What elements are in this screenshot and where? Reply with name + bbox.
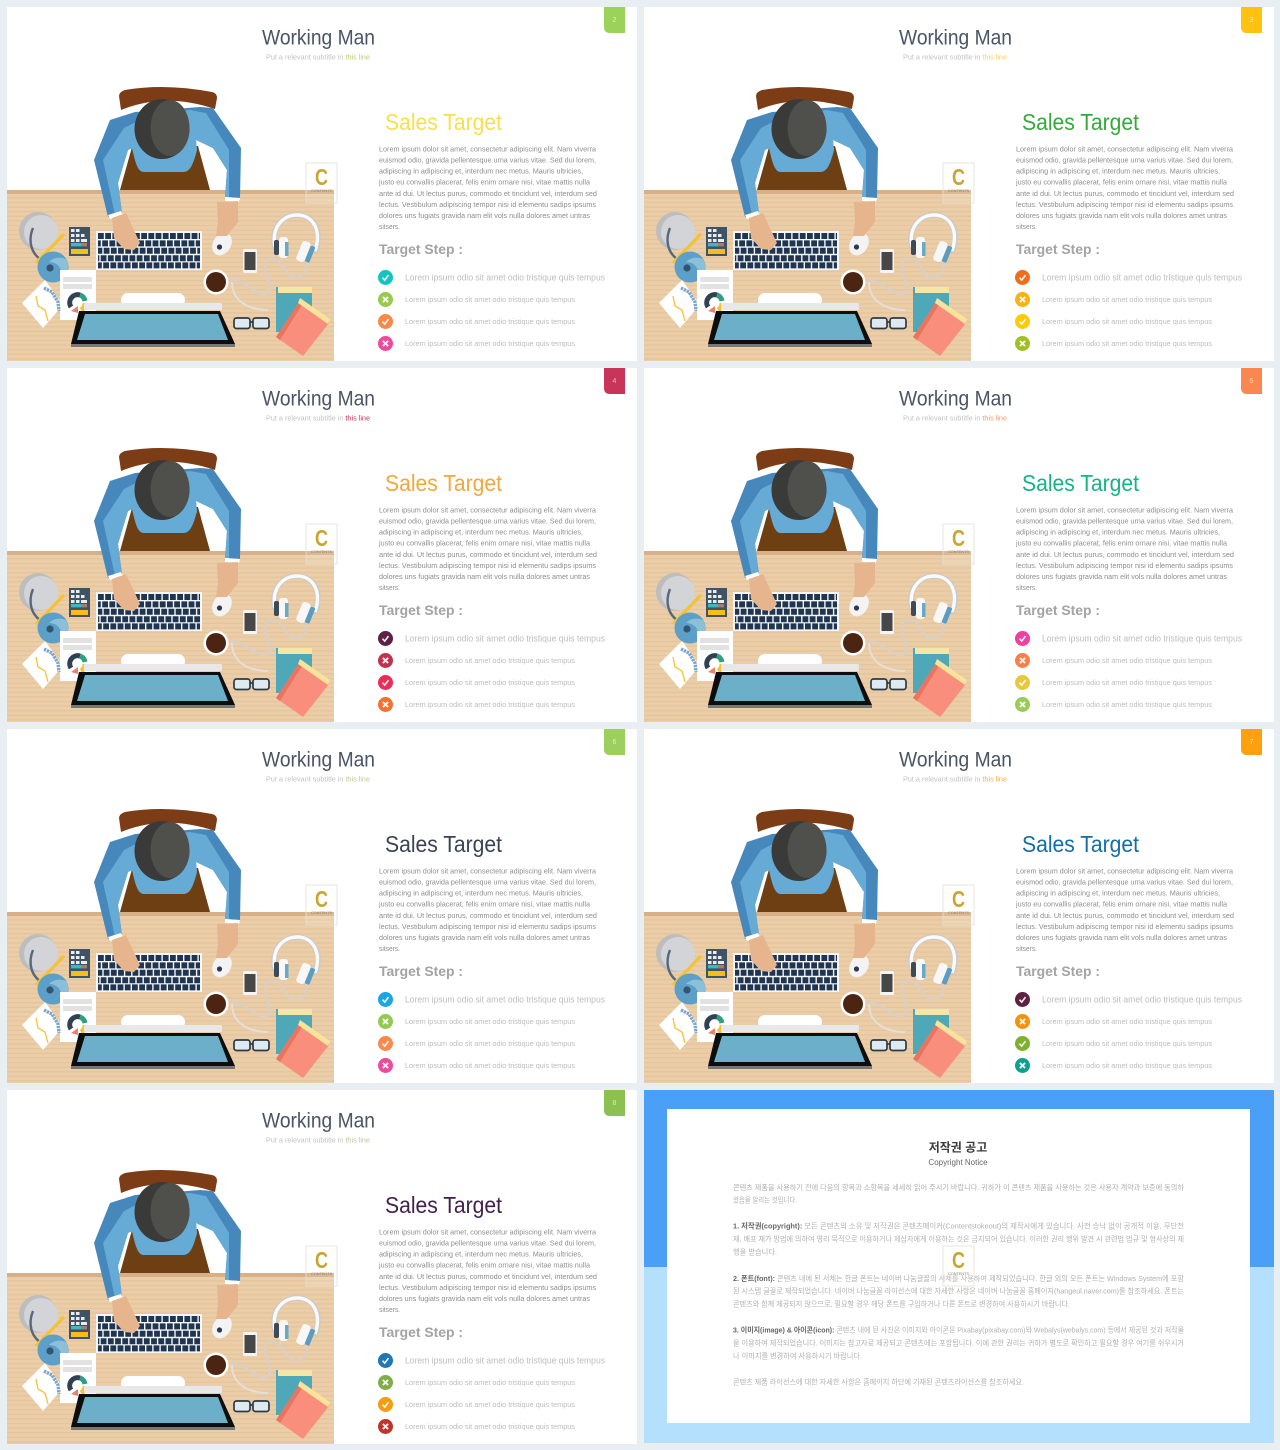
watermark: CONTENTS	[311, 1272, 333, 1276]
heading: Sales Target	[385, 831, 503, 857]
step item 2	[1015, 1014, 1212, 1029]
intro paragraph: 셨음을 알리는 것입니다.	[733, 1196, 797, 1204]
heading: Sales Target	[385, 109, 503, 135]
body text: adipiscing in adipiscing et, interdum nec metus. Mauris ultricies,	[379, 1250, 583, 1258]
body text: sitsers.	[379, 583, 400, 592]
subtitle: Put a relevant subtitle in this line	[266, 416, 370, 422]
body text: euismod odio, gravida pellentesque urna varius vitae. Sed dui lorem,	[379, 156, 596, 164]
body text: adipiscing in adipiscing et, interdum nec metus. Mauris ultricies,	[1016, 528, 1220, 536]
step item 4	[1015, 336, 1212, 351]
body text: lectus. Vestibulum adipiscing tempor nisi id elementu sadips ipsums	[1016, 922, 1233, 931]
step item 3	[378, 675, 575, 690]
step item 4: Lorem ipsum odio sit amet odio tristique quis tempus	[405, 700, 575, 709]
title: Working Man	[899, 748, 1012, 772]
body text: adipiscing in adipiscing et, interdum nec metus. Mauris ultricies,	[1016, 888, 1220, 898]
body text: justo eu convallis placerat, felis enim ornare nisi, vitae mattis nulla	[1015, 538, 1228, 548]
subtitle: Put a relevant subtitle in this line	[266, 54, 370, 62]
watermark	[306, 524, 337, 564]
step item 3: Lorem ipsum odio sit amet odio tristique quis tempus	[1042, 678, 1212, 687]
step list	[378, 631, 605, 712]
watermark: CONTENTS	[311, 189, 333, 193]
body text	[378, 866, 597, 953]
body text: lectus. Vestibulum adipiscing tempor nisi id elementu sadips ipsums	[1016, 561, 1233, 570]
body text: euismod odio, gravida pellentesque urna varius vitae. Sed dui lorem,	[1016, 156, 1233, 164]
step list	[378, 992, 605, 1073]
panel: slide 4	[7, 368, 637, 722]
step item 3: Lorem ipsum odio sit amet odio tristique quis tempus	[405, 1400, 575, 1409]
panel: slide 6	[7, 729, 637, 1083]
subtitle: Put a relevant subtitle in this line	[266, 1138, 370, 1144]
copyright title: 저작권 공고	[929, 1140, 987, 1154]
step item 1	[378, 631, 605, 646]
watermark	[943, 1246, 974, 1286]
body text: justo eu convallis placerat, felis enim ornare nisi, vitae mattis nulla	[378, 178, 591, 186]
body text: dolores uns fugiats gravida nam elit vols nulla dolores amet untras	[1016, 572, 1227, 581]
step item 2	[378, 1375, 575, 1390]
page number tab	[604, 7, 625, 33]
step item 4	[378, 697, 575, 712]
section 3: image and icon: 나 이미지를 변경하여 사용하시기 바랍니다.	[733, 1352, 862, 1360]
step item 3: Lorem ipsum odio sit amet odio tristique quis tempus	[1042, 317, 1212, 326]
heading: Sales Target	[1022, 109, 1140, 135]
watermark: C	[952, 525, 965, 551]
page number tab: 6	[613, 739, 617, 746]
body text: justo eu convallis placerat, felis enim ornare nisi, vitae mattis nulla	[378, 1260, 591, 1270]
body text: sitsers.	[1016, 944, 1037, 953]
subtitle: Put a relevant subtitle in this line	[903, 416, 1007, 422]
body text: sitsers.	[1016, 583, 1037, 592]
title: Working Man	[899, 388, 1012, 410]
copyright subtitle: Copyright Notice	[928, 1158, 988, 1167]
section 1: copyright	[733, 1222, 1184, 1256]
body text: euismod odio, gravida pellentesque urna varius vitae. Sed dui lorem,	[1016, 516, 1233, 526]
heading: Sales Target	[385, 470, 503, 496]
target step heading: Target Step :	[1016, 963, 1100, 979]
step item 1	[378, 1353, 605, 1368]
panel: slide 3	[644, 7, 1274, 361]
body text: justo eu convallis placerat, felis enim ornare nisi, vitae mattis nulla	[378, 900, 591, 908]
body text: dolores uns fugiats gravida nam elit vols nulla dolores amet untras	[379, 933, 590, 942]
step item 4	[1015, 1058, 1212, 1073]
title: Working Man	[899, 26, 1012, 50]
step item 4	[378, 336, 575, 351]
step item 4	[1015, 697, 1212, 712]
watermark: C	[952, 886, 965, 912]
body text: justo eu convallis placerat, felis enim ornare nisi, vitae mattis nulla	[1015, 178, 1228, 186]
body text: Lorem ipsum dolor sit amet, consectetur adipiscing elit. Nam viverra	[379, 506, 597, 514]
body text: ante id dui. Ut lectus purus, commodo et tincidunt vel, interdum sed	[1016, 550, 1234, 559]
watermark: CONTENTS	[948, 550, 970, 554]
section 1: copyright: 1. 저작권(copyright): 모든 콘텐츠의 소유 및 저작권은 콘텐츠메이커(Contentstokeout)의 제작사에게 있습니다. 사전 승낙 없이 공개적 이용, 무단전	[733, 1222, 1184, 1230]
body text: Lorem ipsum dolor sit amet, consectetur adipiscing elit. Nam viverra	[379, 144, 597, 154]
watermark: CONTENTS	[948, 1272, 970, 1276]
page number tab: 4	[613, 378, 617, 385]
step item 3	[1015, 314, 1212, 329]
step item 2	[378, 1014, 575, 1029]
target step heading: Target Step :	[379, 1324, 463, 1340]
body text: justo eu convallis placerat, felis enim ornare nisi, vitae mattis nulla	[1015, 900, 1228, 908]
body text: sitsers.	[1016, 222, 1037, 231]
body text: lectus. Vestibulum adipiscing tempor nisi id elementu sadips ipsums	[379, 922, 596, 931]
body text: lectus. Vestibulum adipiscing tempor nisi id elementu sadips ipsums	[379, 200, 596, 209]
body text: lectus. Vestibulum adipiscing tempor nisi id elementu sadips ipsums	[1016, 200, 1233, 209]
panel: slide 8	[7, 1090, 637, 1444]
body text: sitsers.	[379, 1305, 400, 1314]
body text	[1015, 144, 1234, 231]
target step heading: Target Step :	[379, 602, 463, 618]
target step heading: Target Step :	[1016, 602, 1100, 618]
step list	[378, 270, 605, 351]
body text	[1015, 506, 1234, 592]
step item 2: Lorem ipsum odio sit amet odio tristique quis tempus	[405, 656, 575, 665]
intro paragraph: 콘텐츠 제품을 사용하기 전에 다음의 항목과 소항목을 세세히 읽어 주시기 바랍니다. 귀하가 이 콘텐츠 제품을 사용하는 것은 사용자 계약과 보증에 동의하	[733, 1183, 1184, 1192]
step item 3	[1015, 1036, 1212, 1051]
body text: lectus. Vestibulum adipiscing tempor nisi id elementu sadips ipsums	[379, 561, 596, 570]
body text: adipiscing in adipiscing et, interdum nec metus. Mauris ultricies,	[379, 888, 583, 898]
step item 4: Lorem ipsum odio sit amet odio tristique quis tempus	[1042, 1061, 1212, 1070]
step item 3	[378, 314, 575, 329]
body text: dolores uns fugiats gravida nam elit vols nulla dolores amet untras	[379, 1294, 590, 1303]
panel: copyright notice	[644, 1090, 1274, 1443]
watermark	[943, 885, 974, 925]
title: Working Man	[262, 388, 375, 410]
step item 2: Lorem ipsum odio sit amet odio tristique quis tempus	[1042, 1017, 1212, 1026]
body text: adipiscing in adipiscing et, interdum nec metus. Mauris ultricies,	[379, 166, 583, 176]
step item 1	[1015, 631, 1242, 646]
target step heading: Target Step :	[1016, 241, 1100, 257]
body text: adipiscing in adipiscing et, interdum nec metus. Mauris ultricies,	[379, 528, 583, 536]
step item 3: Lorem ipsum odio sit amet odio tristique quis tempus	[1042, 1039, 1212, 1048]
page number tab: 3	[1250, 17, 1254, 24]
step item 3: Lorem ipsum odio sit amet odio tristique quis tempus	[405, 1039, 575, 1048]
step item 3	[378, 1397, 575, 1412]
section 2: font: 2. 폰트(font): 콘텐츠 내에 된 서체는 한글 폰트는 네이버 나눔글꼴의 서체를 사용하여 제작되었습니다. 한글 외의 모든 폰트는 Windows System에 포함	[733, 1274, 1184, 1283]
step item 2: Lorem ipsum odio sit amet odio tristique quis tempus	[405, 1378, 575, 1387]
page number tab: 5	[1250, 378, 1254, 385]
step item 3	[378, 1036, 575, 1051]
target step heading: Target Step :	[379, 241, 463, 257]
step item 1	[378, 992, 605, 1007]
step item 1	[378, 270, 605, 285]
step item 1: Lorem ipsum odio sit amet odio tristique quis tempus	[405, 994, 605, 1004]
body text: ante id dui. Ut lectus purus, commodo et tincidunt vel, interdum sed	[379, 1272, 597, 1281]
watermark: CONTENTS	[311, 911, 333, 915]
intro paragraph	[733, 1183, 1184, 1204]
page number tab: 7	[1250, 739, 1254, 746]
watermark	[306, 1246, 337, 1286]
step item 2: Lorem ipsum odio sit amet odio tristique quis tempus	[405, 295, 575, 304]
body text: dolores uns fugiats gravida nam elit vols nulla dolores amet untras	[1016, 933, 1227, 942]
section 3: image and icon: 3. 이미지(image) & 아이콘(icon): 콘텐츠 내에 된 사진은 이미지와 아이콘은 Pixabay(pixabay.com)와 Webalys(webalys.com) 등에서 제공된 것과 저작물	[733, 1326, 1184, 1334]
step item 3: Lorem ipsum odio sit amet odio tristique quis tempus	[405, 678, 575, 687]
body text: sitsers.	[379, 222, 400, 231]
body text: ante id dui. Ut lectus purus, commodo et tincidunt vel, interdum sed	[379, 189, 597, 198]
watermark: C	[315, 1247, 328, 1273]
body text: Lorem ipsum dolor sit amet, consectetur adipiscing elit. Nam viverra	[1016, 866, 1234, 876]
step list	[378, 1353, 605, 1434]
step item 2: Lorem ipsum odio sit amet odio tristique quis tempus	[1042, 295, 1212, 304]
step item 4: Lorem ipsum odio sit amet odio tristique quis tempus	[1042, 339, 1212, 348]
illustration: man at desk	[7, 87, 334, 361]
watermark: C	[315, 164, 328, 190]
watermark: C	[315, 525, 328, 551]
watermark	[943, 163, 974, 203]
body text	[378, 144, 597, 231]
section 1: copyright: 행을 받습니다.	[733, 1248, 777, 1256]
watermark: C	[952, 1247, 965, 1273]
page number tab	[604, 729, 625, 755]
step item 1: Lorem ipsum odio sit amet odio tristique quis tempus	[1042, 994, 1242, 1004]
body text: adipiscing in adipiscing et, interdum nec metus. Mauris ultricies,	[1016, 166, 1220, 176]
step item 1	[1015, 992, 1242, 1007]
step item 4: Lorem ipsum odio sit amet odio tristique quis tempus	[405, 1061, 575, 1070]
heading: Sales Target	[385, 1192, 503, 1218]
step item 4: Lorem ipsum odio sit amet odio tristique quis tempus	[405, 339, 575, 348]
page number tab	[1241, 729, 1262, 755]
body text: justo eu convallis placerat, felis enim ornare nisi, vitae mattis nulla	[378, 538, 591, 548]
watermark: CONTENTS	[948, 189, 970, 193]
illustration: man at desk	[644, 87, 971, 361]
step item 2	[378, 653, 575, 668]
step item 1: Lorem ipsum odio sit amet odio tristique quis tempus	[405, 272, 605, 282]
title: Working Man	[262, 1110, 375, 1132]
body text: ante id dui. Ut lectus purus, commodo et tincidunt vel, interdum sed	[1016, 911, 1234, 920]
body text	[378, 506, 597, 592]
body text: dolores uns fugiats gravida nam elit vols nulla dolores amet untras	[379, 211, 590, 220]
step item 3	[1015, 675, 1212, 690]
heading: Sales Target	[1022, 831, 1140, 857]
title: Working Man	[262, 26, 375, 50]
watermark: CONTENTS	[948, 911, 970, 915]
body text: sitsers.	[379, 944, 400, 953]
body text: Lorem ipsum dolor sit amet, consectetur adipiscing elit. Nam viverra	[379, 1228, 597, 1236]
step list	[1015, 631, 1242, 712]
body text: euismod odio, gravida pellentesque urna varius vitae. Sed dui lorem,	[1016, 878, 1233, 886]
target step heading: Target Step :	[379, 963, 463, 979]
subtitle: Put a relevant subtitle in this line	[903, 776, 1007, 784]
body text: dolores uns fugiats gravida nam elit vols nulla dolores amet untras	[1016, 211, 1227, 220]
step item 1: Lorem ipsum odio sit amet odio tristique quis tempus	[1042, 634, 1242, 644]
title: Working Man	[262, 748, 375, 772]
subtitle: Put a relevant subtitle in this line	[266, 776, 370, 784]
step item 2	[1015, 653, 1212, 668]
page number tab: 2	[613, 17, 617, 24]
body text: Lorem ipsum dolor sit amet, consectetur adipiscing elit. Nam viverra	[1016, 506, 1234, 514]
illustration: man at desk	[7, 809, 334, 1083]
section 1: copyright: 재, 배포 재가 방법에 의하여 영리 목적으로 이용하거나 제삼자에게 이용하는 것은 금지되어 있습니다. 이러한 권리 행위 발견 시 관련법 법규 및 형사상의 제	[733, 1234, 1184, 1244]
section 2: font: 콘텐츠와 함께 제공되지 않으므로, 필요할 경우 해당 폰트를 구입하거나 다른 폰트로 변경하여 사용하시기 바랍니다.	[733, 1300, 1070, 1308]
body text: Lorem ipsum dolor sit amet, consectetur adipiscing elit. Nam viverra	[379, 866, 597, 876]
closing note: 콘텐츠 제품 라이선스에 대한 자세한 사항은 홈페이지 하단에 기재된 콘텐츠라이선스를 참조하세요.	[733, 1378, 1024, 1386]
step item 2: Lorem ipsum odio sit amet odio tristique quis tempus	[1042, 656, 1212, 665]
step item 2	[1015, 292, 1212, 307]
panel: slide 7	[644, 729, 1274, 1083]
step item 1: Lorem ipsum odio sit amet odio tristique quis tempus	[1042, 272, 1242, 282]
body text: ante id dui. Ut lectus purus, commodo et tincidunt vel, interdum sed	[379, 550, 597, 559]
step item 4: Lorem ipsum odio sit amet odio tristique quis tempus	[1042, 700, 1212, 709]
body text: ante id dui. Ut lectus purus, commodo et tincidunt vel, interdum sed	[1016, 189, 1234, 198]
step list	[1015, 270, 1242, 351]
illustration: man at desk	[7, 1170, 334, 1444]
step item 4	[378, 1419, 575, 1434]
body text: lectus. Vestibulum adipiscing tempor nisi id elementu sadips ipsums	[379, 1283, 596, 1292]
page number tab	[604, 1090, 625, 1116]
panel: slide 2	[7, 7, 637, 361]
step item 2	[378, 292, 575, 307]
section 2: font: 된 시스템 글꼴로 제작되었습니다. 네이버 나눔글꼴 라이선스에 대한 자세한 사항은 네이버 나눔글꼴 홈페이지(hangeul.naver.com)를 참조하세요. 폰트는	[733, 1286, 1184, 1296]
subtitle: Put a relevant subtitle in this line	[903, 54, 1007, 62]
body text: euismod odio, gravida pellentesque urna varius vitae. Sed dui lorem,	[379, 1238, 596, 1248]
watermark: C	[952, 164, 965, 190]
body text	[378, 1228, 597, 1314]
watermark	[943, 524, 974, 564]
body text: dolores uns fugiats gravida nam elit vols nulla dolores amet untras	[379, 572, 590, 581]
body text	[1015, 866, 1234, 953]
step item 4: Lorem ipsum odio sit amet odio tristique quis tempus	[405, 1422, 575, 1431]
panel: slide 5	[644, 368, 1274, 722]
body text: ante id dui. Ut lectus purus, commodo et tincidunt vel, interdum sed	[379, 911, 597, 920]
page number tab	[1241, 7, 1262, 33]
step item 1: Lorem ipsum odio sit amet odio tristique quis tempus	[405, 1356, 605, 1366]
body text: Lorem ipsum dolor sit amet, consectetur adipiscing elit. Nam viverra	[1016, 144, 1234, 154]
section 3: image and icon	[733, 1326, 1184, 1360]
section 2: font	[733, 1274, 1184, 1308]
illustration: man at desk	[644, 448, 971, 722]
step item 2: Lorem ipsum odio sit amet odio tristique quis tempus	[405, 1017, 575, 1026]
step item 1	[1015, 270, 1242, 285]
watermark: CONTENTS	[311, 550, 333, 554]
step item 4	[378, 1058, 575, 1073]
body text: euismod odio, gravida pellentesque urna varius vitae. Sed dui lorem,	[379, 878, 596, 886]
illustration: man at desk	[7, 448, 334, 722]
watermark	[306, 163, 337, 203]
watermark: C	[315, 886, 328, 912]
page number tab: 8	[613, 1100, 617, 1107]
page number tab	[1241, 368, 1262, 394]
page number tab	[604, 368, 625, 394]
step item 1: Lorem ipsum odio sit amet odio tristique quis tempus	[405, 634, 605, 644]
step list	[1015, 992, 1242, 1073]
illustration: man at desk	[644, 809, 971, 1083]
section 3: image and icon: 을 이용하여 제작되었습니다. 이미지는 참고자료 제공되고 콘텐츠에는 포함됩니다. 이에 관한 권리는 귀하가 별도로 확인하고 필요할 경우 여기를 쉬우시거	[733, 1338, 1184, 1348]
heading: Sales Target	[1022, 470, 1140, 496]
step item 3: Lorem ipsum odio sit amet odio tristique quis tempus	[405, 317, 575, 326]
body text: euismod odio, gravida pellentesque urna varius vitae. Sed dui lorem,	[379, 516, 596, 526]
watermark	[306, 885, 337, 925]
